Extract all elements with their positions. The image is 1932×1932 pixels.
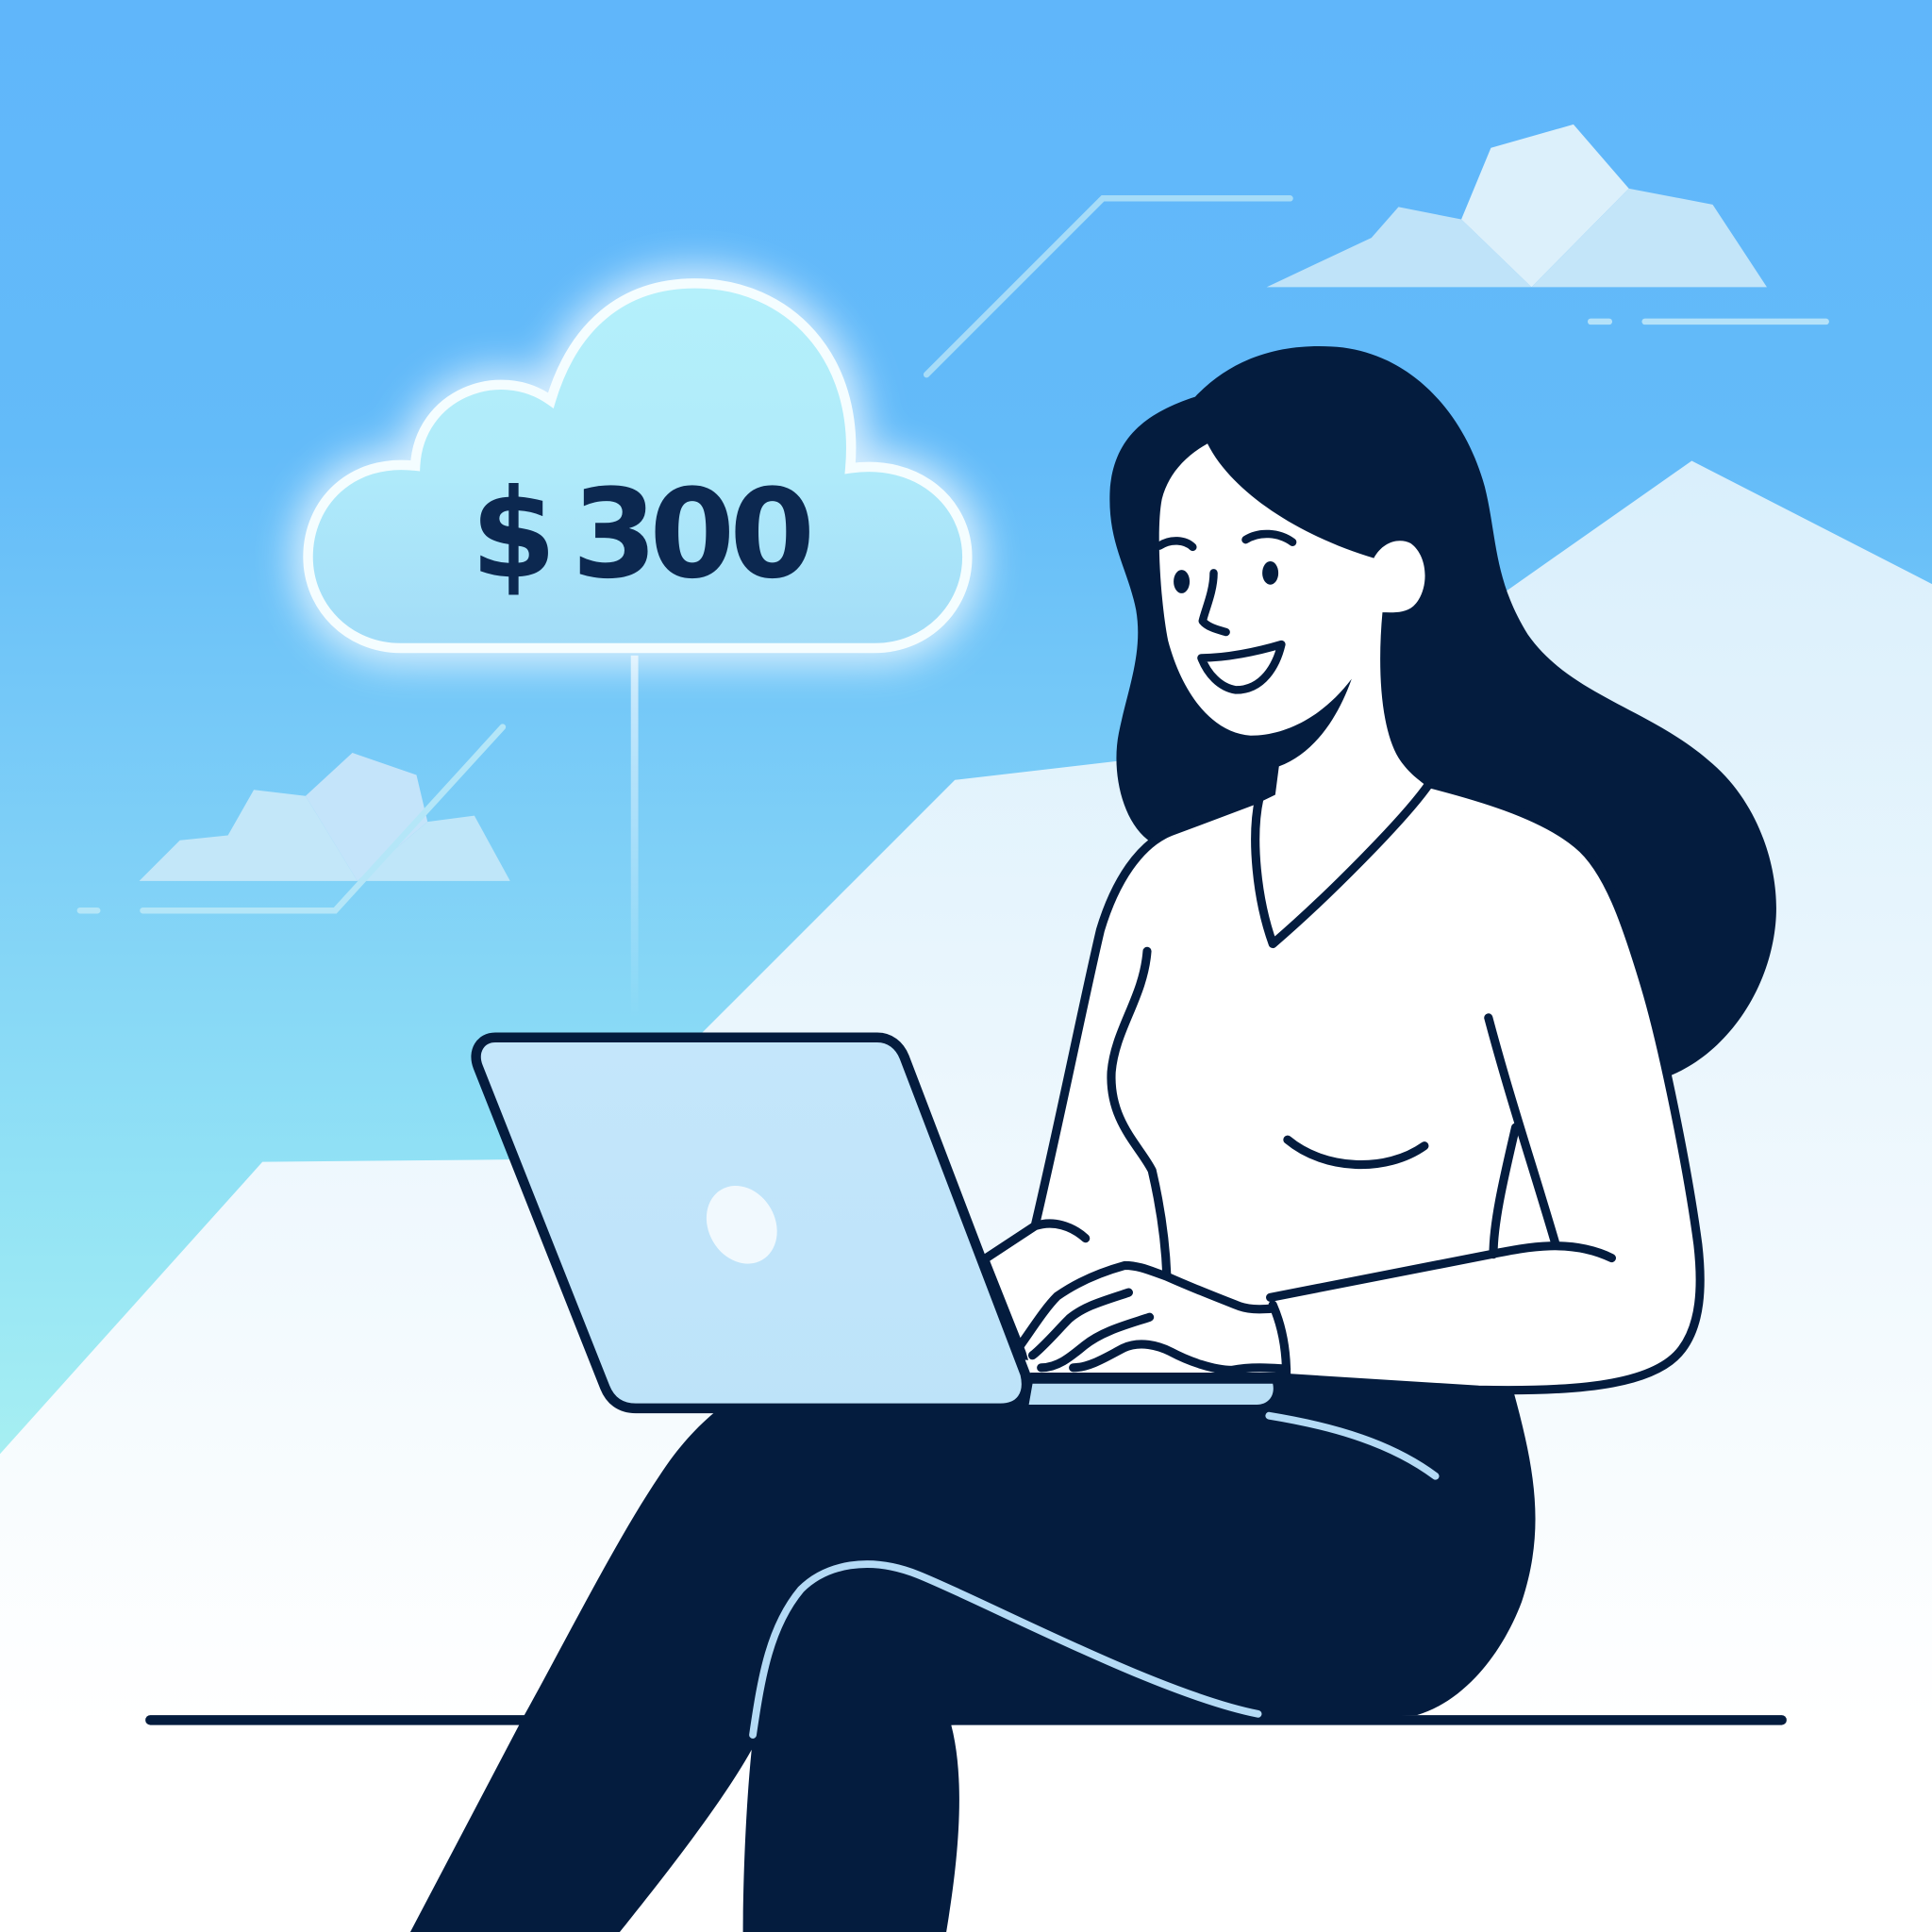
laptop base [1029,1384,1274,1405]
facial features [1159,534,1292,690]
glowing cloud with price [0,283,967,648]
hand on keyboard [1020,1246,1611,1377]
face and neck [1159,443,1426,942]
hair [1109,346,1776,1078]
decorative line: upper [926,198,1826,375]
decorative line: lower [80,727,503,910]
shirt [985,784,1700,1391]
trouser highlights [753,1416,1436,1735]
shirt fold lines [985,951,1555,1276]
laptop logo [692,1173,791,1276]
laptop [476,1038,1274,1408]
price text: $ 300 [0,462,815,606]
trousers [410,1376,1536,1932]
cloud: upper right [1267,125,1767,287]
laptop lid [476,1038,1026,1408]
mountains [0,460,1932,1932]
woman [410,346,1776,1932]
cloud: lower left [140,753,510,881]
connector line from cloud to laptop [631,656,639,1019]
bench line [150,1716,1782,1724]
